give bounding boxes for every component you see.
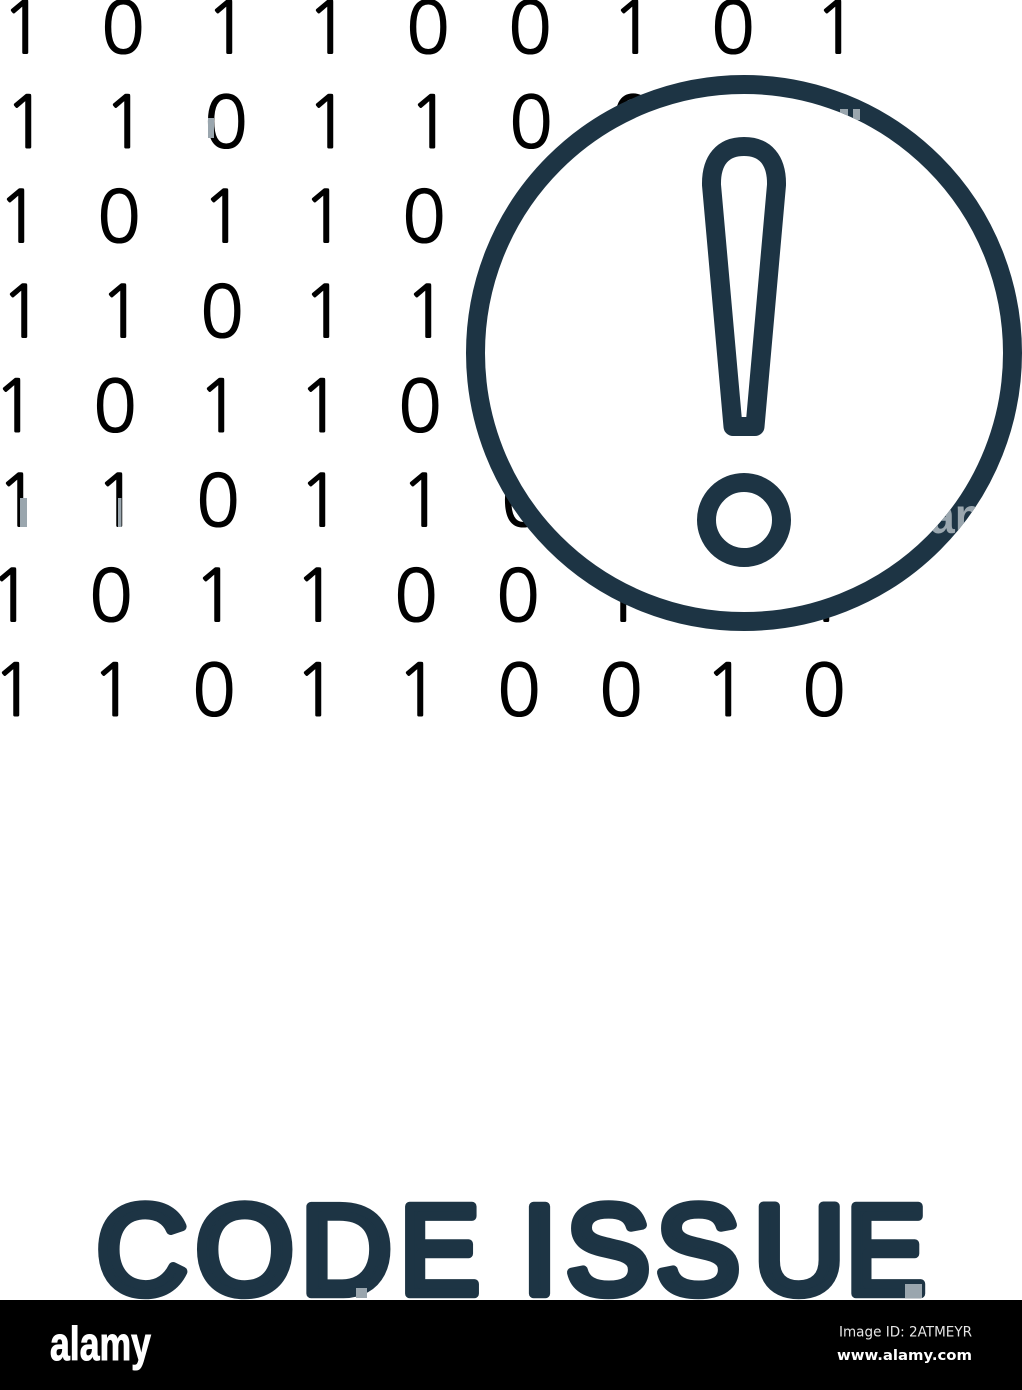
exclamation mark stem [711,146,777,426]
title: E [400,1181,480,1321]
title: COD [96,1179,392,1320]
digit row 6: 110110010 [0,466,850,538]
exclamation mark dot [706,482,782,558]
digit row 3: 10110101 [0,182,854,254]
digit row 5: 101100101 [0,371,850,443]
footer bar [0,1300,1022,1390]
alamy logo: alamy [50,1317,151,1370]
title: ISSU [522,1179,845,1320]
infographic canvas: an [930,488,982,544]
title [96,1179,926,1321]
digit row 7: 101100101 [0,560,846,632]
image id: Image ID: 2ATMEYR [839,1325,972,1341]
title: E [846,1181,926,1321]
warning circle [476,84,1012,622]
website: www.alamy.com [837,1348,972,1364]
digit row 2: 11011001 [4,87,760,159]
icon: warning circle with exclamation mark [476,84,1012,622]
digit row 8: 110110010 [0,655,846,727]
binary digit grid [0,0,858,727]
digit row 4: 110110010 [0,276,854,348]
